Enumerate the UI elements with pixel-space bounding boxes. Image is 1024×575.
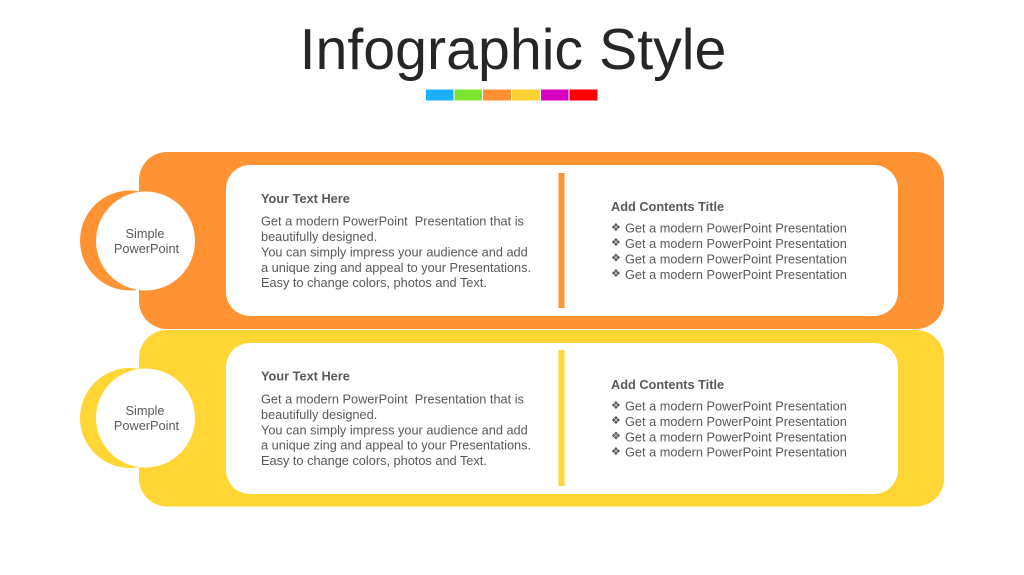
yellow background card [139,330,944,506]
white label circle: Simple [126,226,164,241]
orange crescent circle [80,190,180,290]
right bullet list: Get a modern PowerPoint Presentation [625,267,847,282]
right bullet list: ❖ [611,236,621,249]
white label circle: PowerPoint [114,418,180,433]
white content card [226,165,898,316]
left text block: a unique zing and appeal to your Presentations. [261,260,531,275]
left heading: Your Text Here [261,368,350,384]
left text block: Get a modern PowerPoint Presentation that is [261,392,524,406]
right bullet list: Get a modern PowerPoint Presentation [625,220,847,236]
left text block: Get a modern PowerPoint Presentation that is [261,214,524,228]
right bullet list: Get a modern PowerPoint Presentation [625,430,847,444]
white label circle [96,368,195,468]
left text block: beautifully designed. [261,229,377,244]
right bullet list: Get a modern PowerPoint Presentation [625,398,847,414]
white label circle: Simple [126,403,164,418]
right bullet list [611,220,847,282]
left heading: Your Text Here [261,191,350,206]
orange background card [139,152,944,329]
vertical divider [558,173,564,308]
right bullet list: ❖ [611,252,621,264]
panel: yellow row [80,330,944,506]
right bullet list: ❖ [611,445,621,458]
right bullet list: Get a modern PowerPoint Presentation [625,414,847,429]
left text block: a unique zing and appeal to your Presentations. [261,438,531,452]
yellow crescent circle [80,368,180,468]
right bullet list: Get a modern PowerPoint Presentation [625,252,847,266]
white label circle [96,192,195,290]
right bullet list [611,398,847,460]
left text block: Easy to change colors, photos and Text. [261,275,487,290]
white content card [226,343,898,494]
white label circle: PowerPoint [114,241,180,256]
right heading: Add Contents Title [611,377,724,392]
panel: orange row [80,152,944,329]
right heading: Add Contents Title [611,199,724,214]
right bullet list: ❖ [611,221,621,234]
colour swatch bar [426,90,598,100]
left text block: You can simply impress your audience and add [261,244,528,260]
left text block: beautifully designed. [261,407,377,422]
left text block [261,392,531,468]
right bullet list: ❖ [611,430,621,442]
left text block [261,214,531,290]
right bullet list: Get a modern PowerPoint Presentation [625,444,847,460]
right bullet list: ❖ [611,267,621,280]
title: Infographic Style [300,18,726,82]
right bullet list: Get a modern PowerPoint Presentation [625,236,847,251]
left text block: Easy to change colors, photos and Text. [261,453,487,468]
right bullet list: ❖ [611,399,621,412]
left text block: You can simply impress your audience and add [261,422,528,438]
right bullet list: ❖ [611,414,621,427]
vertical divider [558,350,564,486]
